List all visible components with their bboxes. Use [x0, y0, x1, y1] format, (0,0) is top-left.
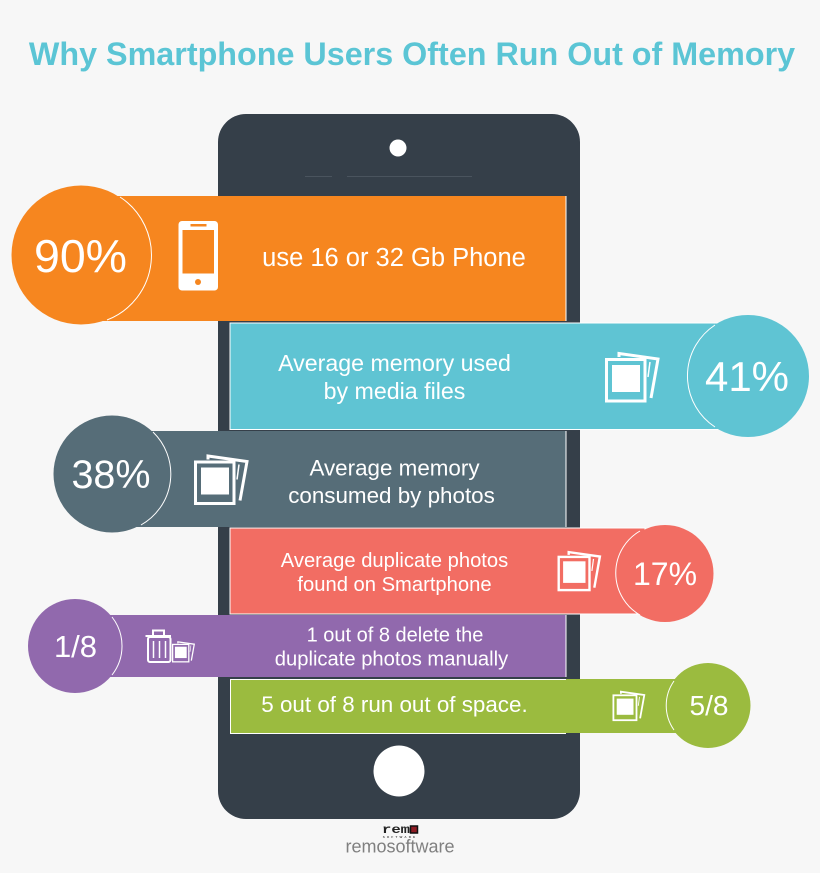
text: duplicates: Average duplicate photos — [281, 550, 508, 572]
badge: 90% — [12, 186, 151, 324]
icon: photo stack — [613, 692, 644, 720]
badge: 5/8: 5/8 — [690, 690, 728, 721]
panel: 17% duplicates — [230, 525, 714, 622]
icon: photo stack — [606, 354, 658, 401]
icon: smartphone — [178, 221, 218, 290]
panel: 90% phone capacity — [12, 186, 566, 324]
panel: 41% media files: by media files — [324, 378, 465, 404]
badge: 17%: 17% — [633, 556, 697, 592]
panel: 1/8 delete manually: duplicate photos manually — [275, 648, 509, 670]
badge: 41%: 41% — [705, 353, 789, 400]
panel: 1/8 delete manually — [28, 599, 566, 693]
logo: remo software — [345, 823, 455, 856]
text: delete manually: 1 out of 8 delete the — [307, 624, 483, 646]
logo: remo software: SOFTWARE — [383, 835, 417, 839]
badge: 17% — [616, 525, 714, 622]
text: media files: Average memory used — [278, 350, 511, 376]
text: phone capacity: use 16 or 32 Gb Phone — [262, 244, 526, 272]
icon: photo stack — [196, 456, 247, 504]
text: out of space: 5 out of 8 run out of space. — [261, 692, 528, 717]
logo: remo software: rem — [382, 823, 410, 837]
badge: 1/8: 1/8 — [54, 629, 97, 664]
panel: 17% duplicates: found on Smartphone — [297, 574, 492, 596]
phone body — [218, 114, 580, 819]
icon: trash with photos — [146, 630, 194, 662]
text: remosoftware: remosoftware — [345, 836, 455, 856]
badge: 90%: 90% — [34, 230, 127, 282]
panel: 38% photos: consumed by photos — [288, 483, 495, 508]
panel: 38% photos — [54, 416, 566, 532]
badge: 1/8 — [28, 599, 122, 693]
title: Why Smartphone Users Often Run Out of Memory — [29, 36, 795, 72]
text: photos: Average memory — [309, 456, 480, 480]
panel: 5/8 out of space — [230, 663, 750, 748]
badge: 38%: 38% — [71, 453, 151, 497]
phone home button — [374, 746, 424, 796]
icon: photo stack — [559, 552, 600, 590]
badge: 41% — [687, 315, 809, 437]
phone camera — [390, 140, 406, 156]
badge: 38% — [54, 416, 171, 532]
badge: 5/8 — [666, 663, 750, 748]
panel: 41% media files — [230, 315, 809, 437]
